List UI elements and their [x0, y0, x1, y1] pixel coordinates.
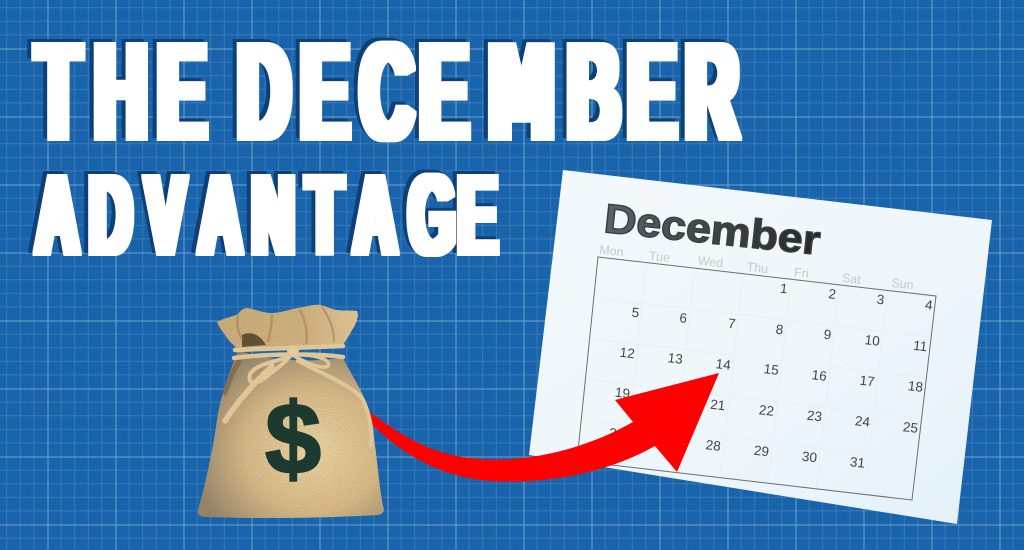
weekday labels: Thu — [746, 260, 769, 276]
calendar dates: 8 — [775, 322, 784, 337]
calendar dates: 23 — [806, 408, 823, 424]
calendar dates: 26 — [608, 425, 625, 442]
calendar dates: 4 — [924, 297, 934, 313]
calendar dates: 21 — [709, 397, 726, 413]
weekday labels — [599, 243, 914, 292]
calendar dates: 19 — [614, 385, 631, 401]
bag body — [198, 350, 384, 518]
calendar dates: 30 — [801, 449, 818, 465]
weekday labels: Wed — [697, 254, 724, 270]
weekday labels: Tue — [648, 249, 671, 265]
calendar dates: 28 — [705, 437, 722, 454]
calendar dates: 31 — [849, 454, 866, 471]
calendar dates: 22 — [758, 402, 775, 419]
calendar dates: 13 — [667, 350, 684, 367]
weekday labels: Fri — [793, 265, 810, 281]
calendar dates: 5 — [631, 305, 640, 320]
calendar border — [577, 257, 936, 500]
title line 1: M — [488, 20, 555, 170]
bag top frill — [217, 305, 358, 350]
calendar dates: 20 — [662, 391, 679, 407]
title line 1: DECE — [238, 15, 468, 169]
calendar dates: 11 — [912, 338, 928, 354]
calendar dates: 25 — [902, 419, 919, 436]
title line 1: THE — [37, 15, 206, 169]
calendar dates: 16 — [811, 367, 828, 384]
calendar dates: 17 — [859, 373, 876, 389]
weekday labels: Sun — [891, 276, 914, 292]
weekday labels: Sat — [841, 271, 862, 287]
calendar dates: 1 — [779, 281, 788, 296]
title — [36, 15, 738, 279]
calendar dates: 7 — [727, 316, 736, 331]
calendar month heading: December — [602, 195, 823, 264]
calendar dates: 3 — [876, 292, 885, 307]
icon: money bag — [198, 305, 384, 518]
calendar dates: 6 — [679, 310, 688, 326]
title line 1: BER — [568, 15, 738, 169]
calendar dates: 27 — [657, 432, 674, 449]
calendar dates: 29 — [753, 443, 770, 459]
calendar dates: 10 — [864, 332, 881, 349]
calendar dates: 14 — [715, 356, 732, 373]
arrow: from money bag to December 14 — [368, 373, 719, 482]
calendar dates: 18 — [907, 378, 924, 395]
calendar paper — [529, 170, 992, 524]
calendar dates: 24 — [854, 413, 871, 430]
title line 2: ADVANTAGE — [36, 152, 497, 279]
calendar dates: 12 — [619, 345, 636, 361]
calendar dates: 15 — [763, 361, 780, 378]
title line 1 — [37, 15, 738, 170]
calendar inner grid — [581, 263, 931, 494]
bag rope tie — [225, 346, 372, 445]
calendar dates: 9 — [823, 327, 832, 342]
bag frill folds and neck shadow — [224, 307, 334, 395]
weekday labels: Mon — [599, 243, 624, 259]
dollar sign: $ — [265, 383, 321, 495]
calendar page — [529, 170, 992, 524]
calendar dates: 2 — [828, 286, 837, 302]
calendar dates — [608, 281, 934, 471]
